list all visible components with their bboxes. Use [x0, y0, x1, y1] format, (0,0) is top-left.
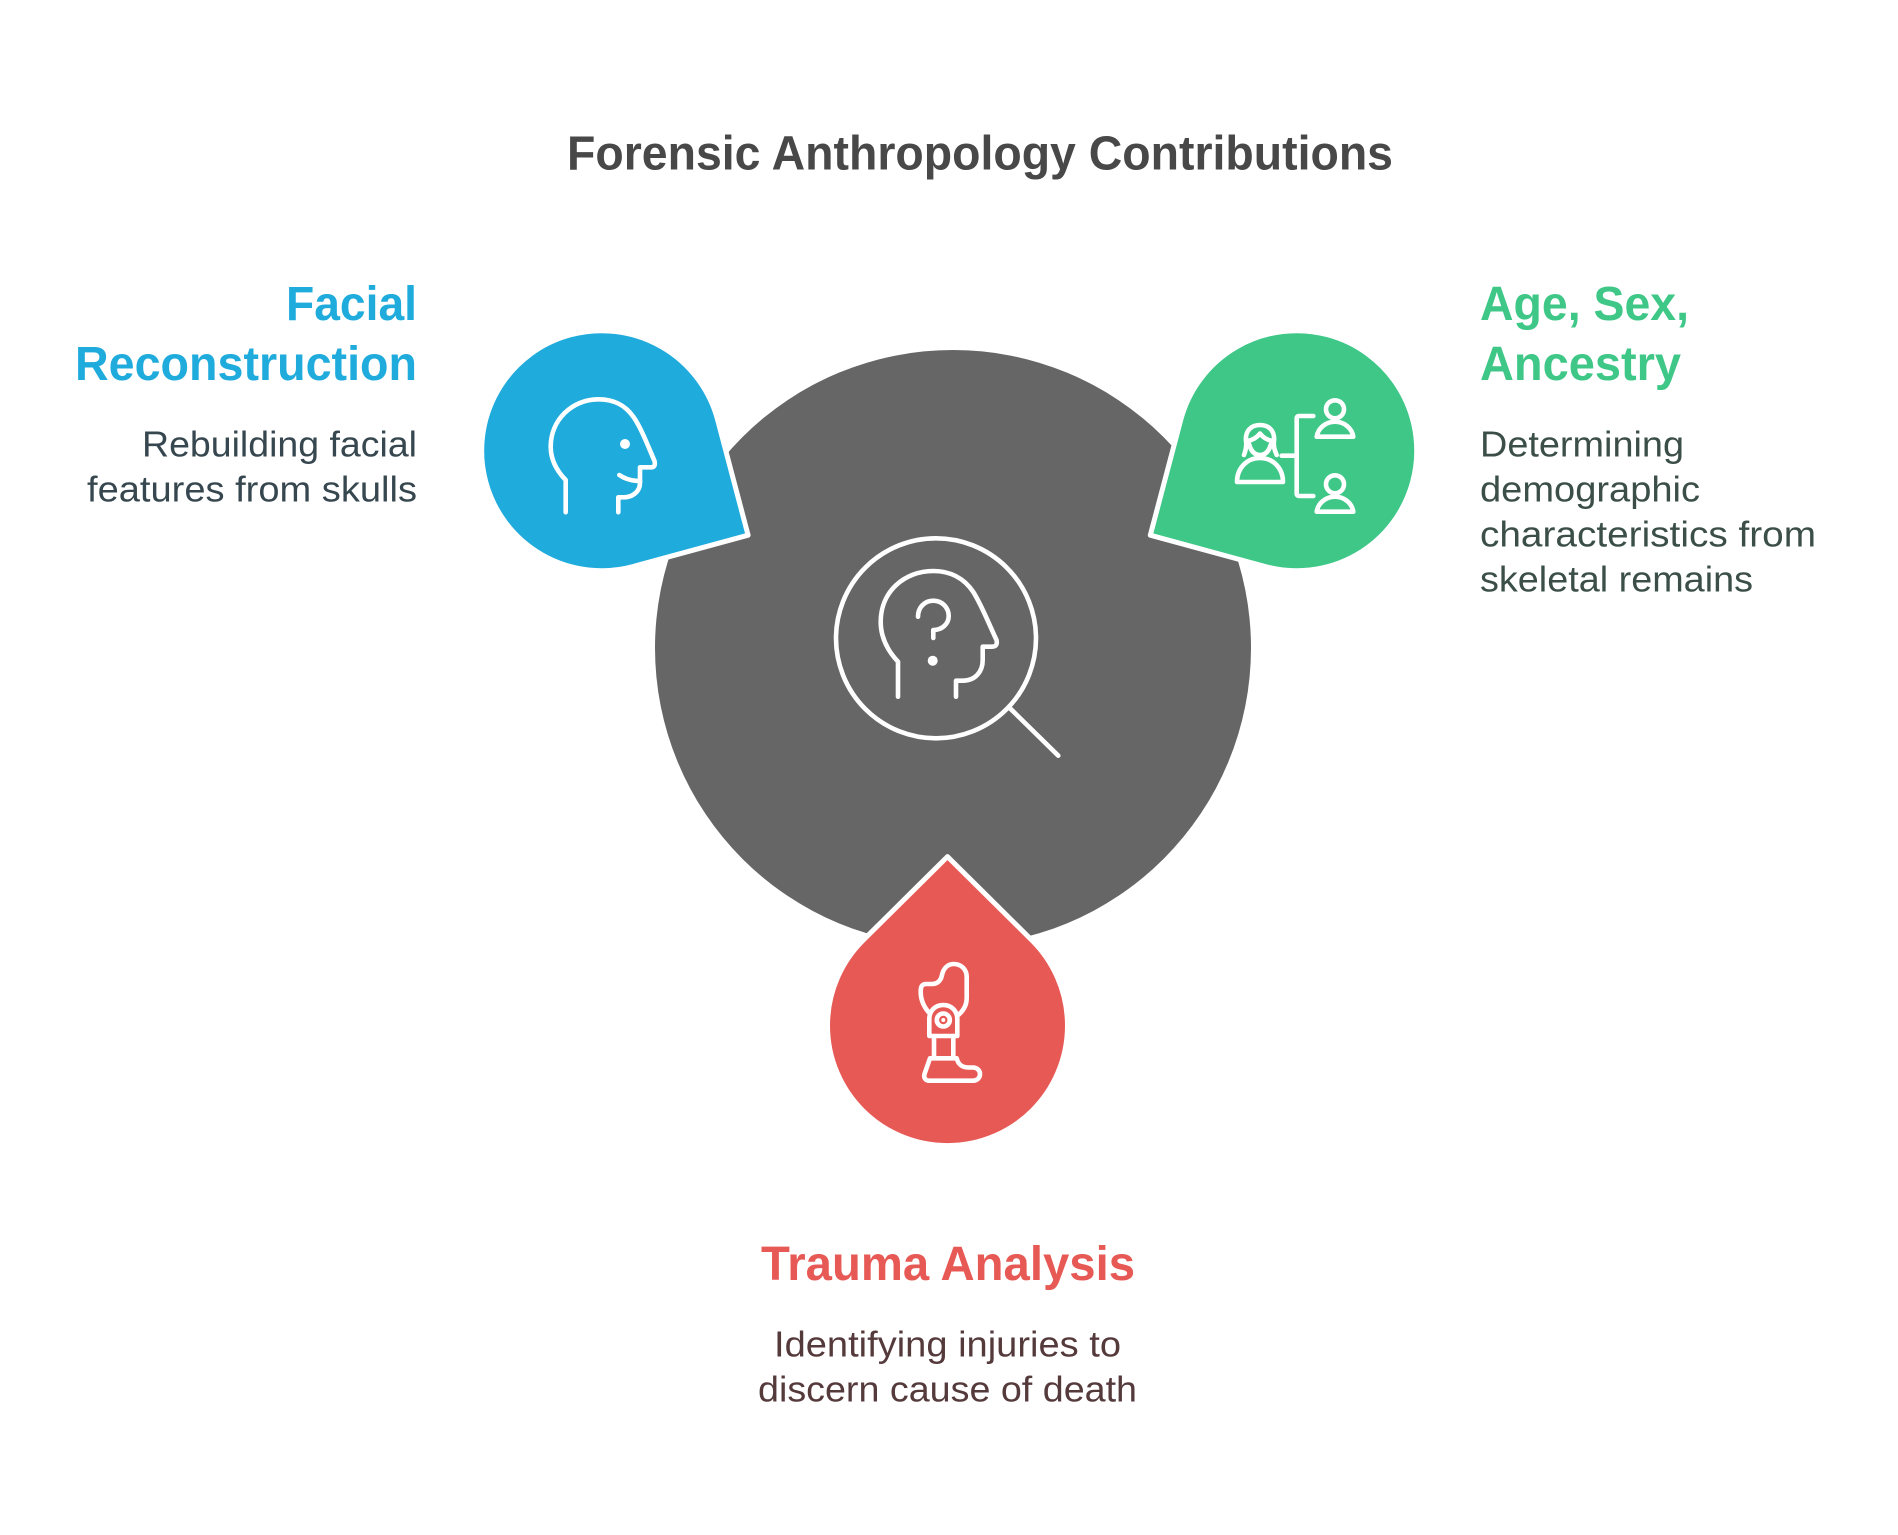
description: facial reconstruction: features from skulls	[87, 469, 417, 510]
heading: facial reconstruction	[75, 278, 417, 391]
panel: trauma analysis teardrop	[828, 857, 1068, 1146]
icon: prosthetic leg	[921, 964, 980, 1081]
description: facial reconstruction: Rebuilding facial	[142, 424, 417, 465]
text block: trauma analysis	[758, 1238, 1137, 1410]
heading: facial reconstruction: Reconstruction	[75, 338, 417, 391]
icon: head with question mark under magnifying glass	[836, 538, 1058, 756]
icon: woman connected to two people	[1237, 400, 1353, 512]
panel: age sex ancestry teardrop	[1150, 331, 1417, 571]
icon: head profile	[551, 399, 655, 512]
description: trauma analysis: discern cause of death	[758, 1368, 1137, 1410]
central circle with icon	[655, 350, 1251, 946]
heading: age sex ancestry: Age, Sex,	[1480, 278, 1689, 331]
panel: facial reconstruction teardrop	[482, 331, 748, 571]
heading: age sex ancestry: Ancestry	[1480, 338, 1681, 391]
description: age sex ancestry: skeletal remains	[1480, 558, 1753, 600]
central grey circle	[655, 350, 1251, 946]
description: age sex ancestry: demographic	[1480, 469, 1700, 510]
text block: age sex ancestry	[1480, 278, 1816, 600]
green teardrop	[1150, 331, 1417, 571]
blue teardrop	[482, 331, 748, 571]
heading: age sex ancestry	[1480, 278, 1689, 391]
description: facial reconstruction	[87, 424, 417, 510]
description: age sex ancestry	[1480, 424, 1816, 600]
title: Forensic Anthropology Contributions	[567, 128, 1393, 180]
description: age sex ancestry: characteristics from	[1480, 514, 1816, 555]
red teardrop	[828, 857, 1068, 1146]
description: trauma analysis: Identifying injuries to	[774, 1324, 1121, 1364]
description: trauma analysis	[758, 1324, 1137, 1410]
description: age sex ancestry: Determining	[1480, 424, 1684, 465]
heading: facial reconstruction: Facial	[286, 278, 417, 331]
heading: trauma analysis: Trauma Analysis	[761, 1238, 1135, 1291]
text block: facial reconstruction	[75, 278, 417, 510]
